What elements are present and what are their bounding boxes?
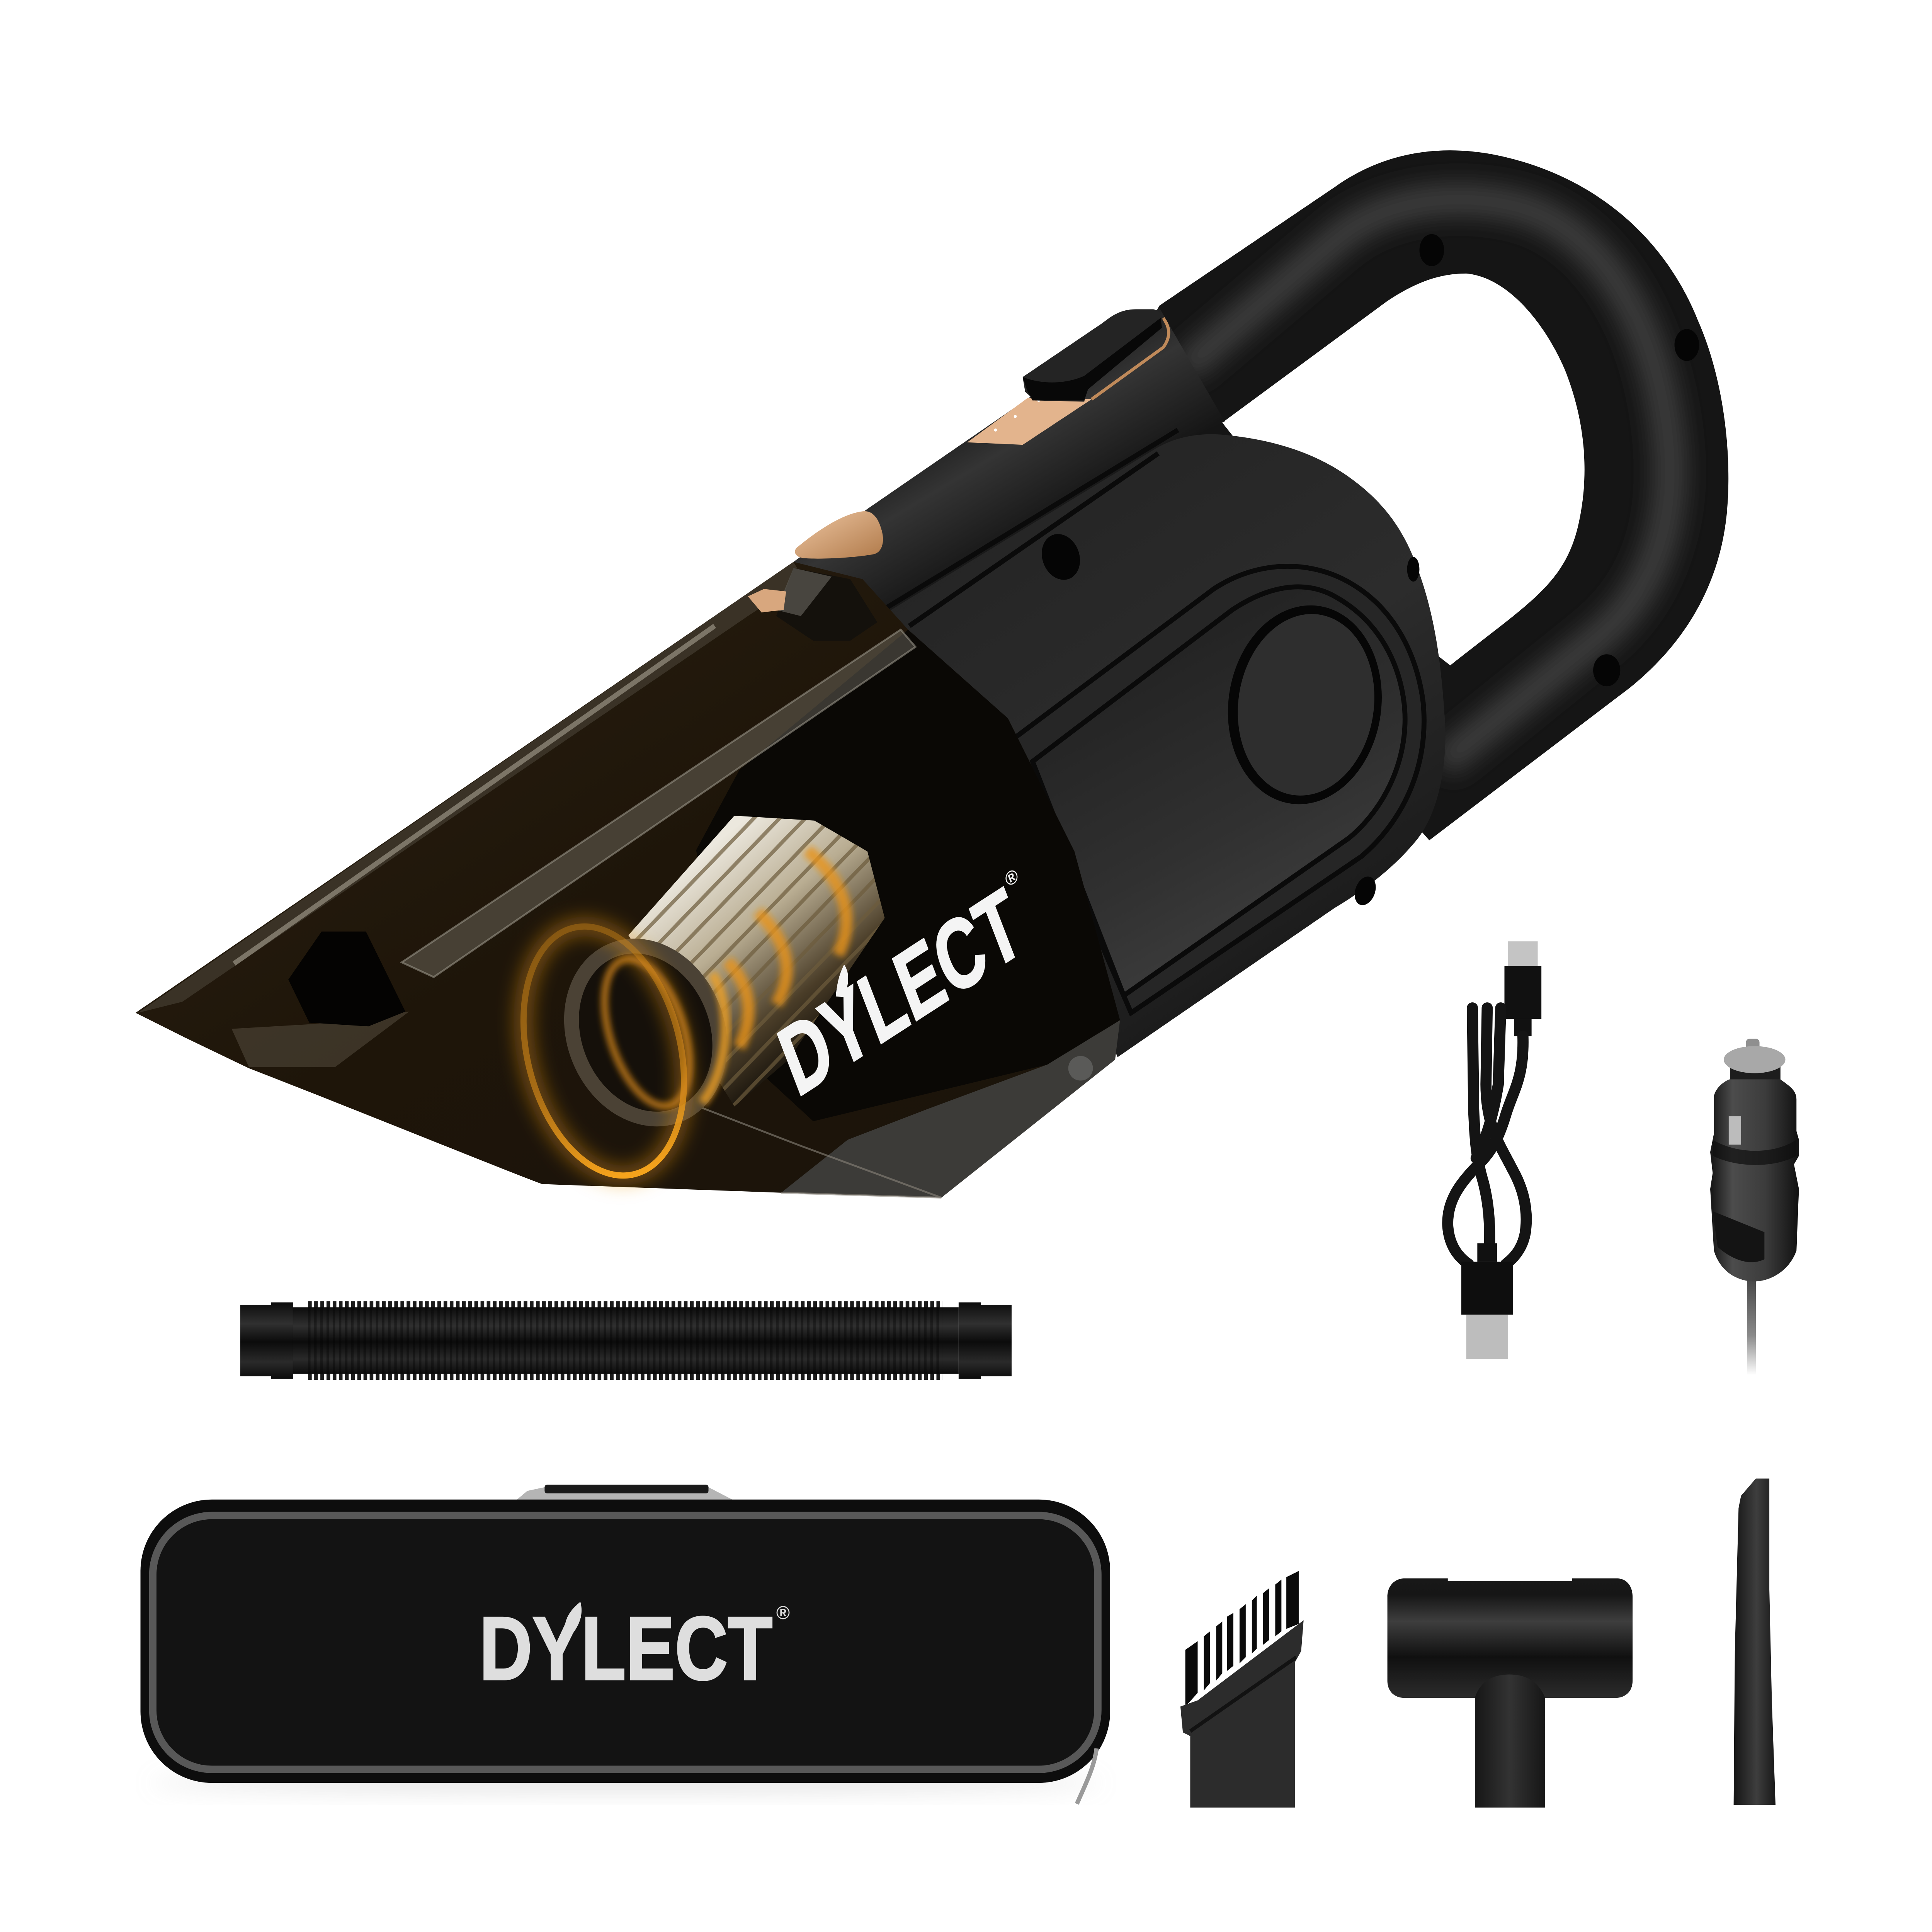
raised side panel xyxy=(1013,566,1424,1013)
charger barrel xyxy=(1710,1079,1799,1281)
bag logo: ® xyxy=(776,1603,790,1623)
left cuff xyxy=(240,1303,293,1379)
USB-C charging cable xyxy=(1448,941,1541,1359)
logo on vacuum: DYLECT xyxy=(766,867,1035,1117)
gold status strip xyxy=(967,398,1092,445)
nozzle black piece xyxy=(288,932,405,1026)
cup grey base xyxy=(641,1020,1120,1197)
bag handle strap xyxy=(544,1485,709,1493)
storage bag xyxy=(141,1485,1110,1804)
power button xyxy=(1215,595,1395,814)
brush shoulder and shaft xyxy=(1180,1620,1304,1808)
bottom connector body xyxy=(1461,1262,1513,1315)
gold release button xyxy=(795,511,883,559)
top connector metal xyxy=(1508,941,1538,966)
logo on vacuum xyxy=(765,856,1049,1117)
brush nozzle xyxy=(1180,1571,1304,1808)
bag trim xyxy=(153,1515,1098,1769)
right cuff xyxy=(959,1303,1012,1379)
top connector neck xyxy=(1514,1019,1532,1036)
handle loop xyxy=(1157,150,1729,840)
charger dark recess xyxy=(1713,1211,1764,1262)
charger side clip xyxy=(1729,1116,1741,1145)
screw holes xyxy=(1036,234,1699,908)
car charger xyxy=(1710,1039,1799,1375)
slider switch xyxy=(1023,309,1163,402)
top connector body xyxy=(1504,966,1541,1019)
vacuum main unit xyxy=(136,123,1750,1197)
orange airflow rings xyxy=(499,910,725,1193)
zipper pull xyxy=(1077,1748,1097,1804)
crevice nozzle xyxy=(1734,1479,1776,1805)
cup black band xyxy=(696,629,1120,1121)
cable strands xyxy=(1448,1008,1526,1264)
bag body xyxy=(141,1500,1110,1783)
charger knurl xyxy=(1730,1062,1781,1092)
dust cup xyxy=(136,562,1120,1197)
bag logo: DYLECT xyxy=(479,1598,772,1699)
hose core xyxy=(293,1307,959,1374)
bag handle xyxy=(513,1487,739,1503)
cup neck xyxy=(776,568,877,641)
stem joint xyxy=(1475,1675,1545,1808)
flexible hose xyxy=(240,1301,1012,1380)
gold slider trim xyxy=(1092,318,1169,399)
filter end ring xyxy=(546,923,745,1141)
charger band shadow xyxy=(1713,1140,1796,1165)
brush ridge xyxy=(1190,1657,1296,1731)
charger cable xyxy=(1747,1277,1756,1375)
slider front face xyxy=(1023,318,1162,400)
bottom connector metal xyxy=(1466,1315,1508,1359)
air filter xyxy=(546,816,885,1141)
hose fins xyxy=(307,1301,942,1380)
body groove xyxy=(881,430,1178,626)
bottom connector neck xyxy=(1477,1243,1497,1262)
cup inner rail xyxy=(402,629,915,977)
cup top edge band xyxy=(138,562,803,1013)
logo on vacuum: ® xyxy=(1002,864,1021,891)
bristles xyxy=(1185,1571,1299,1706)
head xyxy=(1388,1578,1633,1698)
motor body xyxy=(881,434,1446,1057)
inset side panel xyxy=(1032,587,1405,996)
cup neck glass xyxy=(776,568,832,616)
charger pin xyxy=(1746,1039,1760,1053)
bag shadow xyxy=(151,1776,1100,1790)
charger cap xyxy=(1724,1046,1786,1073)
wide T nozzle xyxy=(1388,1578,1633,1808)
cup nozzle lip xyxy=(231,1012,409,1067)
small gold tab xyxy=(748,589,786,612)
upper tube xyxy=(794,308,1225,641)
hose ribs xyxy=(307,1307,942,1374)
orange airflow on filter xyxy=(727,850,846,1047)
cup top highlight xyxy=(234,626,714,964)
